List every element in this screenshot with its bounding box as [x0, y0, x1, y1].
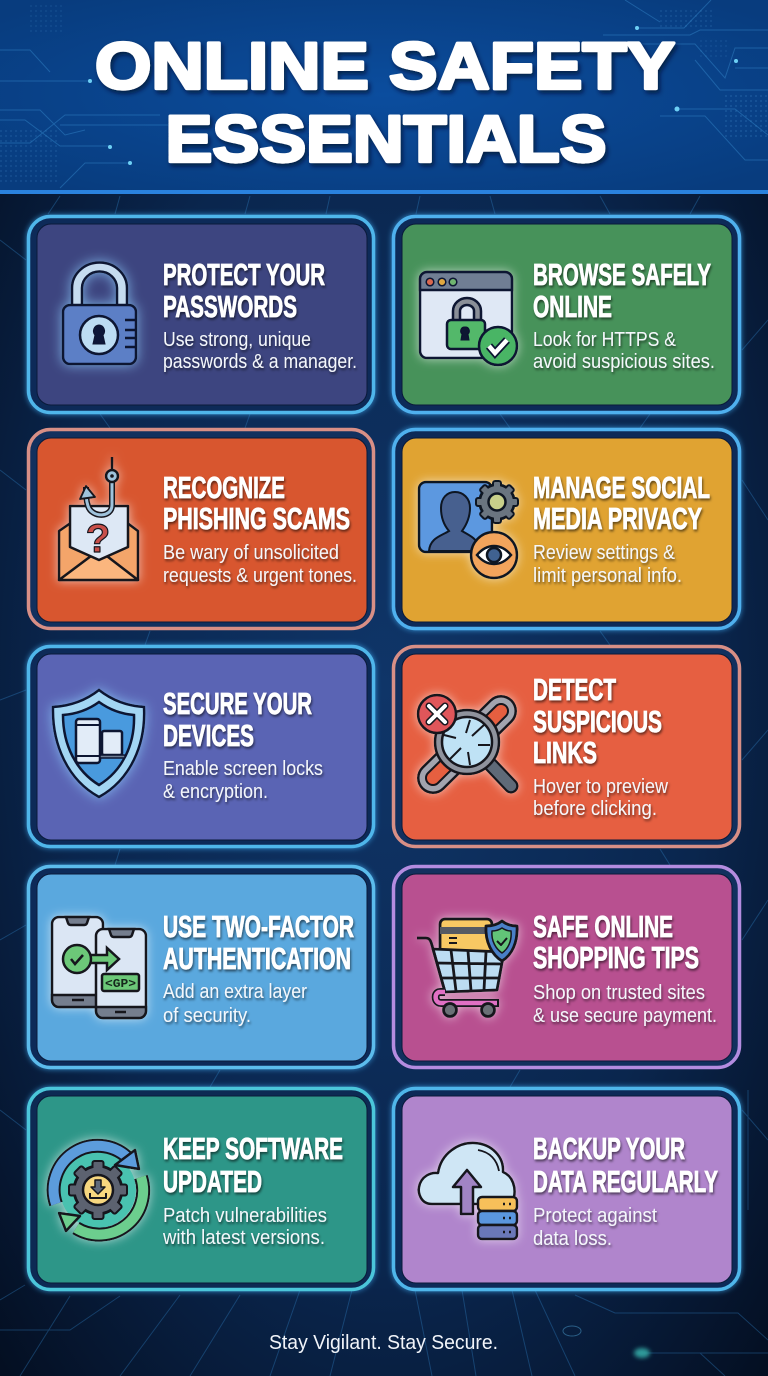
header band: [0, 0, 768, 190]
description: browse safely online: avoid suspicious sites.: [533, 351, 715, 373]
description: backup your data regularly: Protect against: [533, 1205, 657, 1227]
heading: safe online shopping tips: [533, 910, 699, 975]
description: browse safely online: Look for HTTPS &: [533, 329, 677, 351]
description: keep software updated: [162, 1205, 327, 1249]
description: detect suspicious links: before clicking.: [533, 798, 657, 820]
description: protect your passwords: [163, 329, 357, 373]
title: ESSENTIALS: [166, 102, 606, 176]
title: [95, 28, 675, 176]
heading: protect your passwords: PASSWORDS: [163, 290, 297, 324]
description: backup your data regularly: [533, 1205, 657, 1250]
icon: gear with sync arrows: [54, 1146, 143, 1235]
description: detect suspicious links: [533, 776, 668, 820]
panel: secure your devices: [28, 646, 374, 846]
icon: envelope with hook: ?: [86, 517, 110, 561]
description: use two-factor authentication: of security.: [163, 1005, 251, 1027]
heading: manage social media privacy: MEDIA PRIVACY: [533, 502, 702, 536]
description: manage social media privacy: [533, 542, 682, 587]
description: detect suspicious links: Hover to preview: [533, 776, 668, 798]
panel: manage social media privacy: [394, 430, 740, 628]
icon: two phones with code: <GP>: [105, 977, 136, 991]
description: protect your passwords: passwords & a manager.: [163, 351, 357, 373]
heading: safe online shopping tips: SAFE ONLINE: [533, 910, 673, 944]
heading: detect suspicious links: DETECT: [533, 673, 616, 707]
description: secure your devices: & encryption.: [163, 781, 268, 803]
heading: backup your data regularly: BACKUP YOUR: [533, 1132, 685, 1166]
heading: keep software updated: [163, 1132, 343, 1199]
heading: secure your devices: DEVICES: [163, 719, 254, 753]
icon: shield with devices: [53, 690, 144, 797]
footer tagline: Stay Vigilant. Stay Secure.: [269, 1332, 498, 1354]
icon: browser with lock: [420, 272, 517, 365]
description: keep software updated: with latest versions.: [162, 1227, 325, 1249]
description: recognize phishing scams: requests & urgent tones.: [163, 565, 357, 587]
heading: recognize phishing scams: RECOGNIZE: [163, 471, 285, 505]
panel: browse safely online: [394, 216, 740, 412]
description: backup your data regularly: data loss.: [533, 1228, 612, 1250]
heading: manage social media privacy: [533, 471, 710, 536]
heading: keep software updated: KEEP SOFTWARE: [163, 1132, 343, 1166]
panel: detect suspicious links: [394, 646, 740, 846]
description: secure your devices: [163, 758, 323, 803]
description: use two-factor authentication: [163, 981, 307, 1027]
description: protect your passwords: Use strong, unique: [163, 329, 311, 351]
description: recognize phishing scams: Be wary of unsolicited: [163, 542, 339, 564]
heading: recognize phishing scams: [163, 471, 350, 536]
icon: envelope with hook: [59, 457, 138, 580]
description: secure your devices: Enable screen locks: [163, 758, 323, 780]
heading: secure your devices: [163, 687, 312, 753]
panel: safe online shopping tips: [394, 866, 740, 1068]
heading: recognize phishing scams: PHISHING SCAMS: [163, 502, 350, 536]
description: safe online shopping tips: & use secure payment.: [533, 1005, 717, 1027]
heading: detect suspicious links: LINKS: [533, 736, 597, 770]
heading: use two-factor authentication: AUTHENTICATION: [163, 942, 351, 976]
description: manage social media privacy: limit personal info.: [533, 565, 682, 587]
heading: protect your passwords: PROTECT YOUR: [163, 258, 325, 292]
heading: backup your data regularly: [533, 1132, 718, 1199]
title: ONLINE SAFETY: [95, 28, 675, 102]
heading: secure your devices: SECURE YOUR: [163, 687, 312, 721]
description: use two-factor authentication: Add an extra layer: [163, 981, 307, 1003]
background ring node: [563, 1326, 581, 1336]
icon: two phones with code: [52, 917, 146, 1018]
description: safe online shopping tips: Shop on trusted sites: [533, 982, 705, 1004]
panel: protect your passwords: [28, 216, 374, 412]
icon: broken link under magnifier: [418, 695, 511, 786]
background glow node: [634, 1348, 650, 1358]
heading: protect your passwords: [163, 258, 325, 324]
heading: use two-factor authentication: [163, 910, 354, 976]
heading: safe online shopping tips: SHOPPING TIPS: [533, 941, 699, 975]
panel: recognize phishing scams: [28, 430, 374, 628]
description: keep software updated: Patch vulnerabilities: [163, 1205, 327, 1227]
heading: browse safely online: [533, 258, 711, 324]
heading: use two-factor authentication: USE TWO-FACTOR: [163, 910, 354, 944]
header rule: [0, 190, 768, 194]
icon: shopping cart with card and shield: [417, 919, 517, 1016]
icon: profile, gear and eye: [419, 481, 518, 578]
panel: keep software updated: [28, 1088, 374, 1290]
panel: use two-factor authentication: [28, 866, 374, 1068]
panel: backup your data regularly: [394, 1088, 740, 1290]
description: browse safely online: [533, 329, 715, 373]
icon: padlock: [63, 263, 136, 364]
description: recognize phishing scams: [163, 542, 357, 587]
heading: detect suspicious links: [533, 673, 662, 770]
heading: browse safely online: ONLINE: [533, 290, 612, 324]
description: manage social media privacy: Review settings &: [533, 542, 676, 564]
icon: cloud upload and server: [419, 1143, 517, 1239]
description: safe online shopping tips: [533, 982, 717, 1027]
heading: keep software updated: UPDATED: [163, 1165, 262, 1199]
heading: detect suspicious links: SUSPICIOUS: [533, 705, 662, 739]
